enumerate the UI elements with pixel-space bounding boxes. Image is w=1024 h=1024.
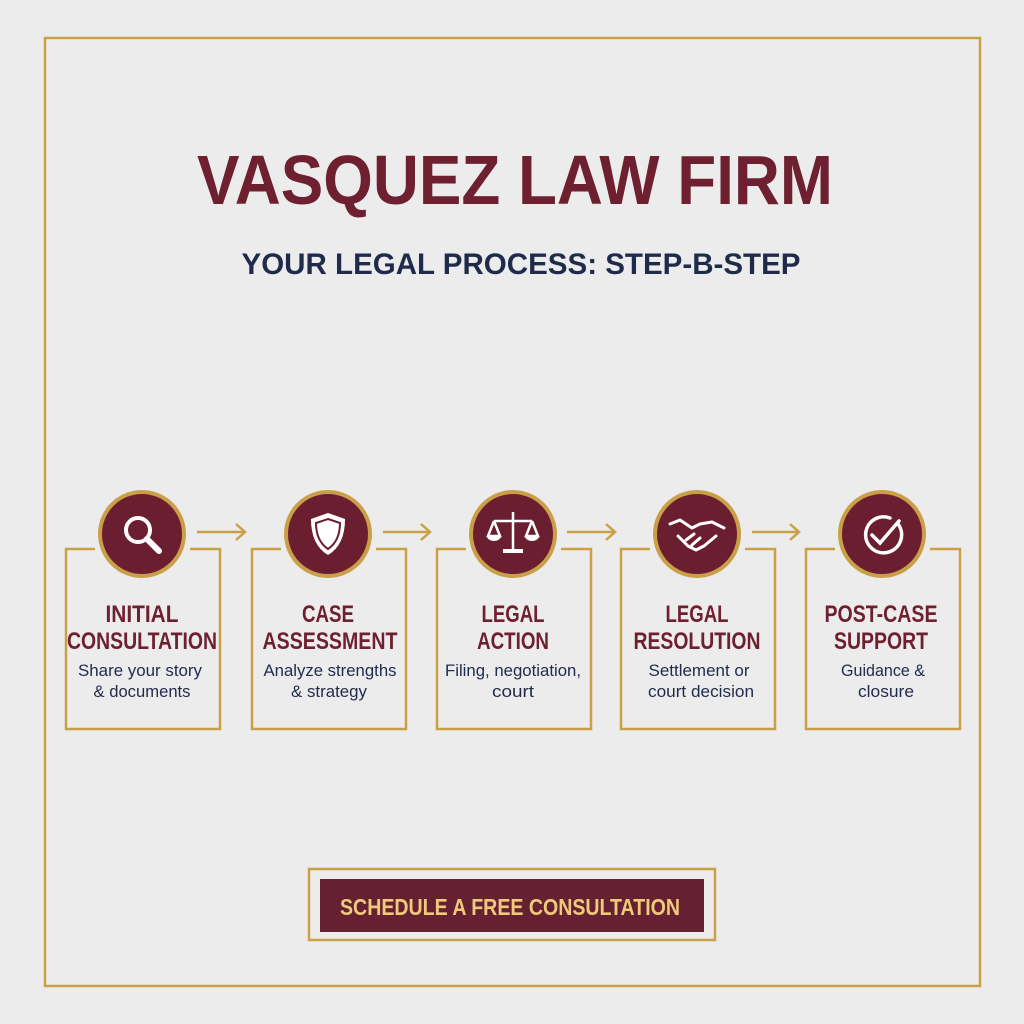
step 4: legal resolution: RESOLUTION [634, 628, 760, 655]
icon: magnifier [126, 518, 159, 551]
step 2: case assessment: Analyze strengths [264, 661, 396, 680]
title: VASQUEZ LAW FIRM [197, 141, 833, 219]
step 5: post-case support: closure [858, 682, 914, 701]
button: schedule consultation: SCHEDULE A FREE CONSULTATION [340, 894, 680, 920]
step 5: post-case support [806, 492, 960, 729]
step 3: legal action: LEGAL [482, 601, 544, 628]
step 3: legal action: Filing, negotiation, [445, 661, 581, 680]
step 4: legal resolution: LEGAL [666, 601, 728, 628]
icon: handshake [670, 520, 724, 550]
step 5: post-case support: POST-CASE [824, 601, 938, 628]
arrow 3 [567, 524, 615, 540]
icon: check [866, 517, 902, 553]
arrow 4 [752, 524, 799, 540]
step 1: initial consultation [66, 492, 220, 729]
icon: shield [311, 513, 345, 555]
arrow 2 [383, 524, 430, 540]
step 3: legal action: ACTION [477, 628, 549, 655]
step 2: case assessment: & strategy [291, 682, 367, 701]
step 1: initial consultation: CONSULTATION [67, 628, 217, 655]
step 2: case assessment: ASSESSMENT [262, 628, 398, 655]
step 2: case assessment [252, 492, 406, 729]
step 4: legal resolution: court decision [648, 682, 754, 701]
icon: scales [488, 512, 538, 551]
step 5: post-case support: SUPPORT [834, 628, 928, 655]
step 4: legal resolution [621, 492, 775, 729]
step 4: legal resolution: Settlement or [648, 661, 750, 680]
step 3: legal action [437, 492, 591, 729]
subtitle: YOUR LEGAL PROCESS: STEP-B-STEP [242, 248, 800, 281]
step 5: post-case support: Guidance & [841, 661, 926, 680]
arrow 1 [197, 524, 245, 540]
step 1: initial consultation: Share your story [78, 661, 202, 680]
step 1: initial consultation: INITIAL [106, 601, 178, 628]
step 3: legal action: court [492, 682, 534, 701]
step 1: initial consultation: & documents [94, 682, 190, 701]
button: schedule consultation [309, 869, 715, 940]
step 2: case assessment: CASE [302, 601, 354, 628]
